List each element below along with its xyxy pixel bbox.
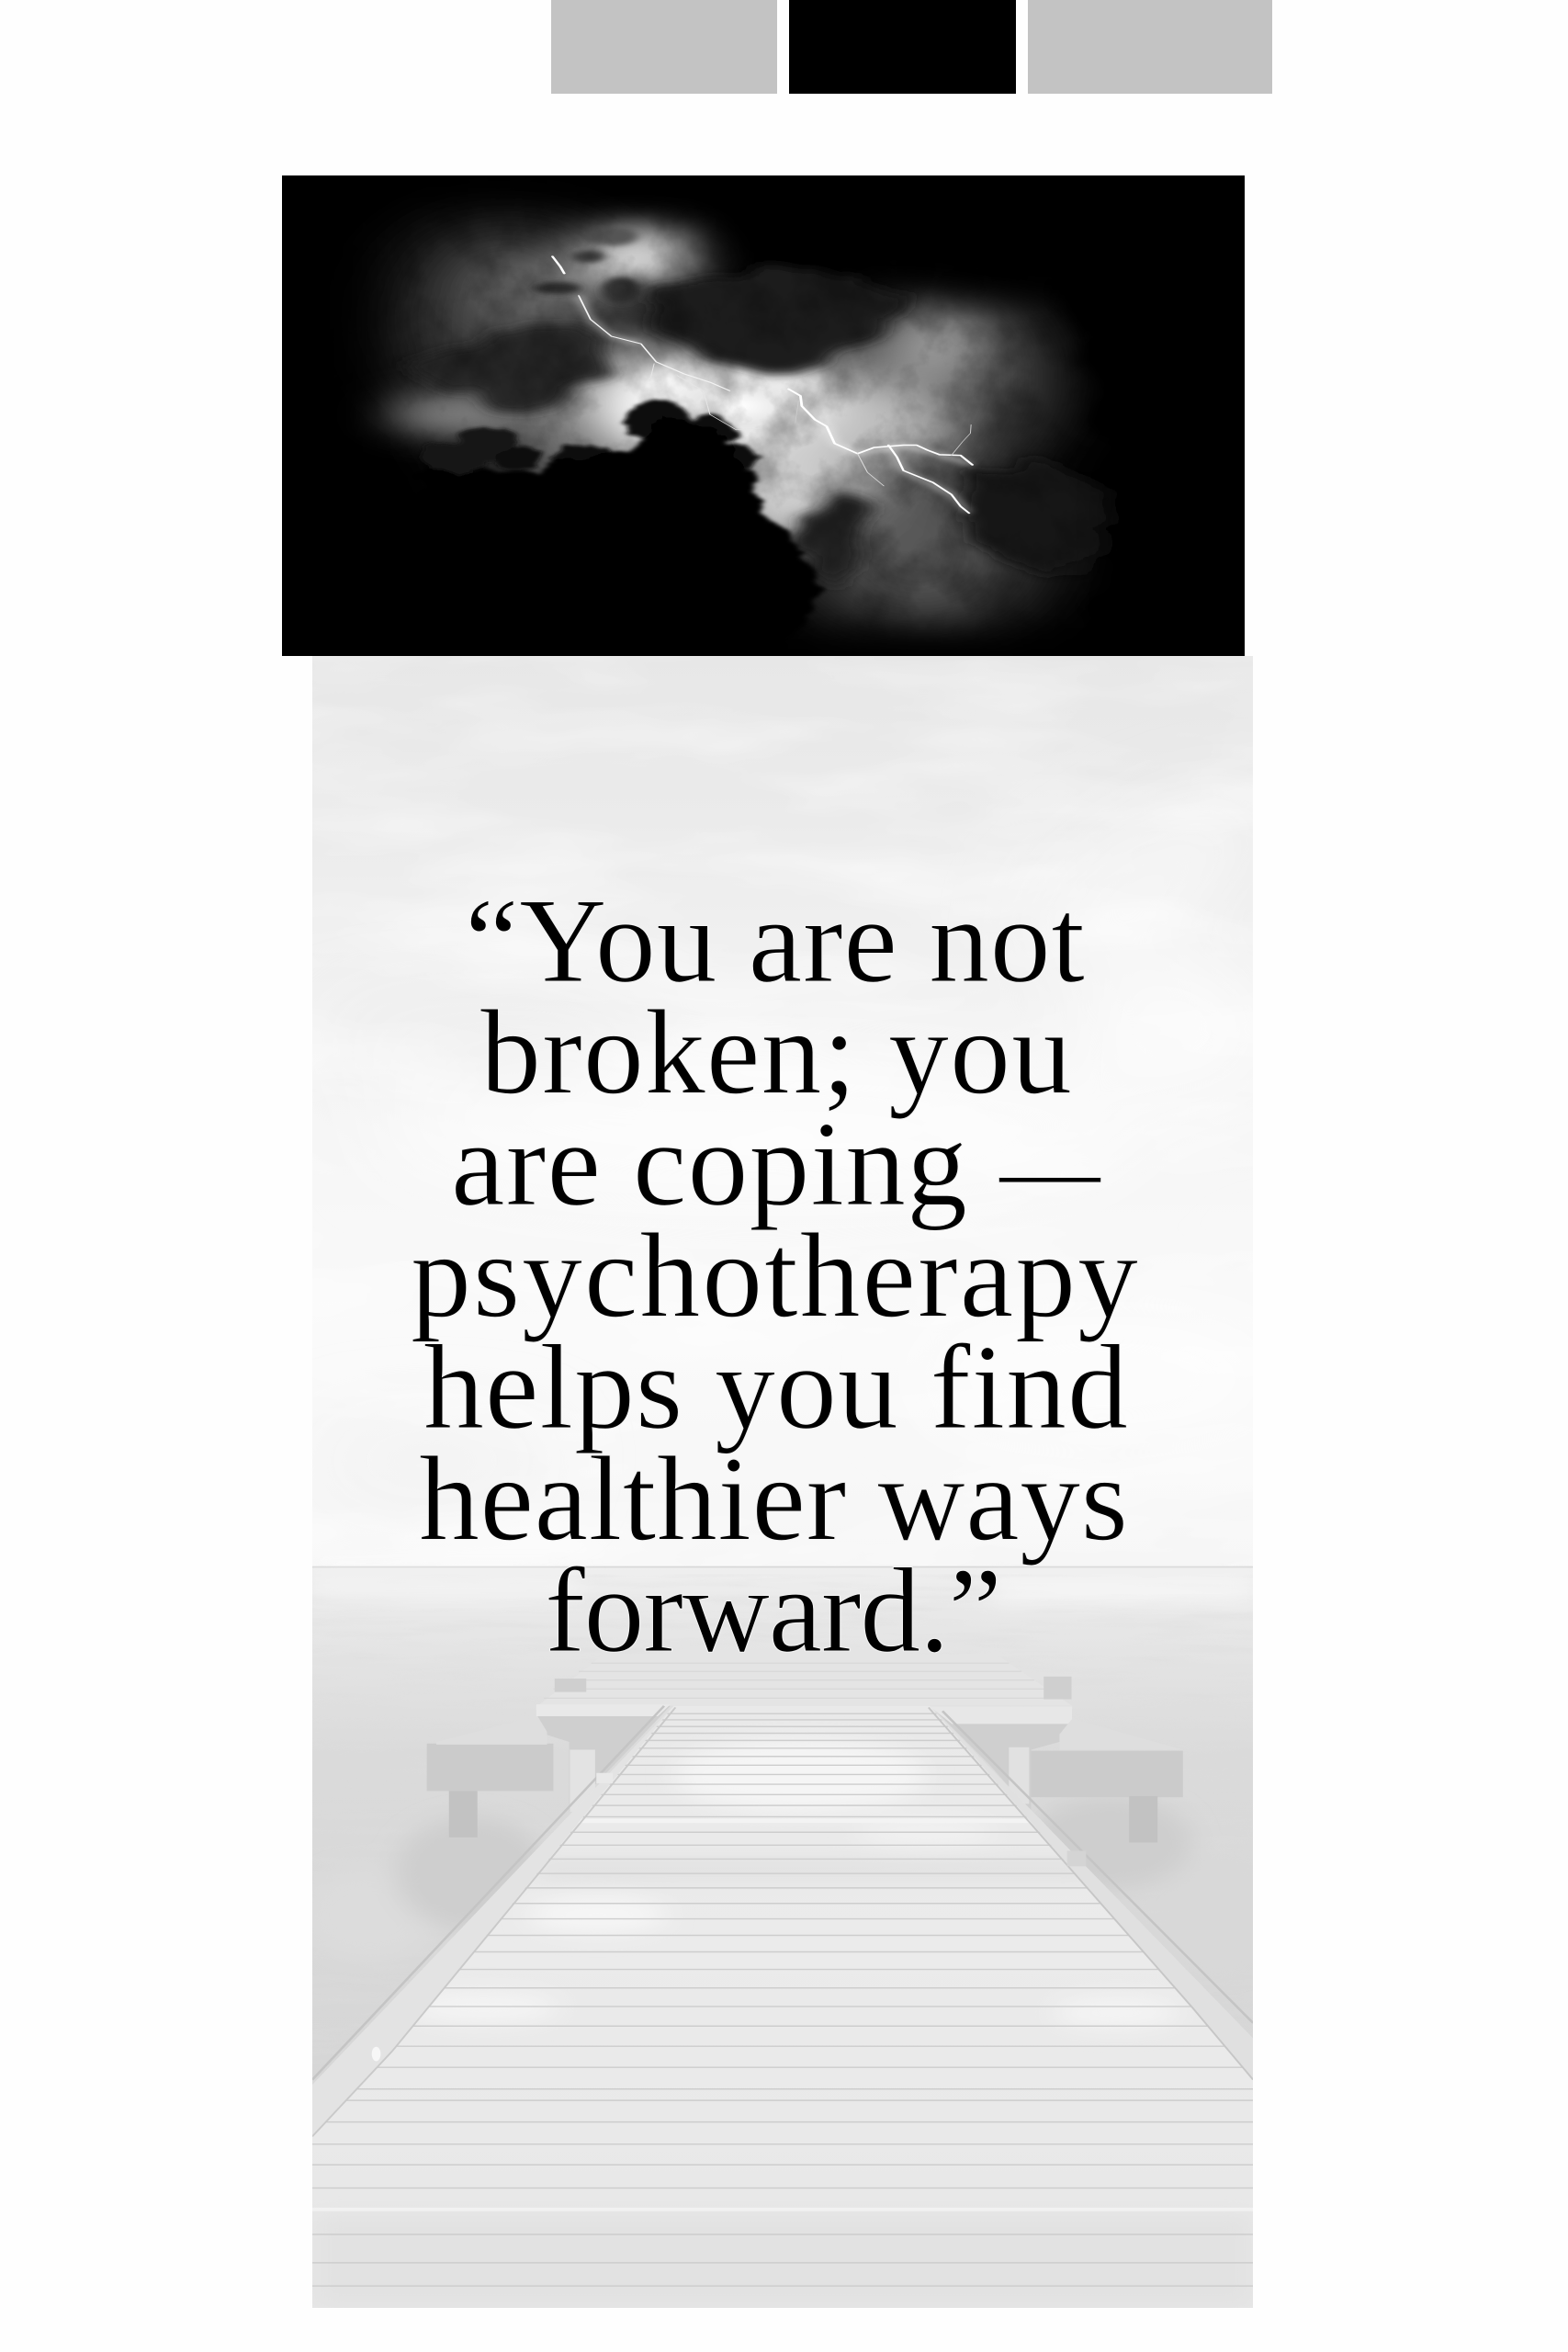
top navigation bars <box>551 0 1272 94</box>
quote line 5: helps you find <box>423 1319 1128 1454</box>
right dark cloud <box>784 324 1119 585</box>
bar: centre black <box>789 0 1016 94</box>
pier far deck <box>537 1655 1072 1706</box>
bottom and side vignette <box>360 399 985 652</box>
cloud mottling texture <box>432 217 1036 626</box>
storm cloud photo with lightning <box>282 175 1245 656</box>
pier main deck <box>312 1706 1253 2308</box>
quote line 2: broken; you <box>480 985 1072 1119</box>
water <box>312 1567 1253 2085</box>
upper black sky <box>904 263 1043 312</box>
pier photo panel <box>294 656 1291 2308</box>
dark outer rail shadows <box>312 1706 1253 2080</box>
bar: left grey <box>551 0 777 94</box>
quote line 7: forward.” <box>545 1543 1002 1678</box>
quote line 1: “You are not <box>465 873 1085 1008</box>
lightning glow <box>579 296 973 513</box>
upper dark cloud <box>644 269 913 379</box>
top small cloud wisps <box>535 227 641 304</box>
bar: right grey <box>1028 0 1272 94</box>
lightning bolts <box>552 256 973 513</box>
pier side rails <box>312 1706 1253 2136</box>
storm glow haze <box>382 218 1032 632</box>
pier blocks and pillars <box>427 1677 1183 1842</box>
foreground black clouds <box>423 397 827 621</box>
quote text <box>411 873 1138 1678</box>
quote line 6: healthier ways <box>419 1431 1128 1566</box>
quote line 3: are coping <box>451 1096 967 1231</box>
left dark cloud <box>408 324 610 418</box>
quote line 3 dash: — <box>998 1114 1101 1226</box>
quote line 4: psychotherapy <box>411 1207 1138 1343</box>
